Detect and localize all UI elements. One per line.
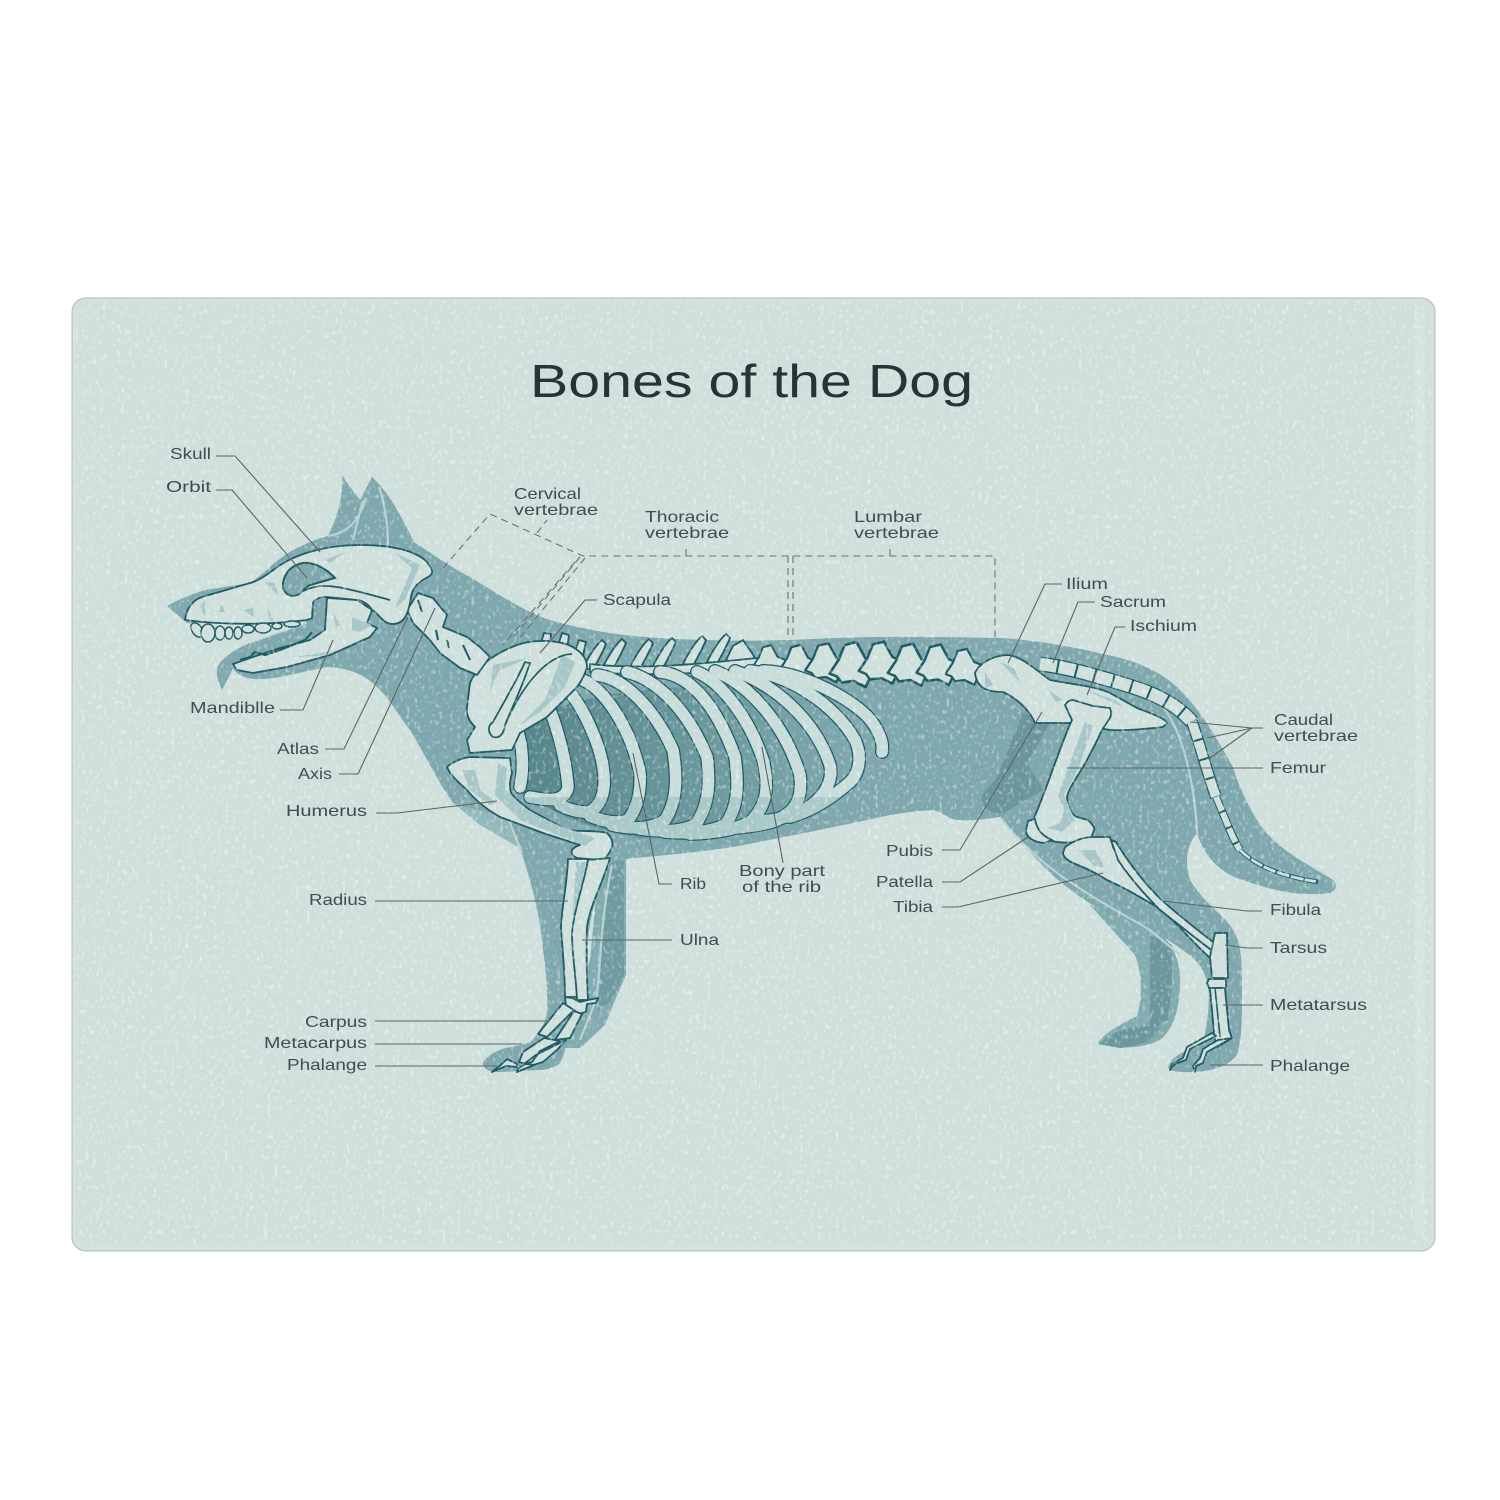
label: Sacrum: Sacrum: [1100, 594, 1166, 611]
patella: [1026, 819, 1052, 843]
radius: [561, 859, 588, 997]
label: Lumbar vertebrae: vertebrae: [854, 525, 939, 542]
label: Tarsus: Tarsus: [1270, 940, 1327, 957]
lumbar vertebrae: [752, 642, 986, 687]
vertebrae bracket dashed lines: [443, 514, 995, 645]
mandible: [233, 598, 377, 673]
label: Scapula: Scapula: [603, 592, 671, 609]
label: Ilium: Ilium: [1066, 576, 1108, 593]
label: Axis: [298, 608, 435, 783]
lower teeth: [240, 632, 312, 660]
hind phalanges: [1170, 1033, 1232, 1072]
skull arch and orbit: [297, 586, 390, 600]
ulna: [572, 858, 610, 1000]
far-side chest shade: [453, 803, 518, 847]
label: Axis: Axis: [298, 766, 332, 783]
metacarpus: [538, 1003, 582, 1040]
label: Fibula: [1163, 901, 1321, 919]
upper teeth: [188, 621, 300, 642]
label: Fibula: Fibula: [1270, 902, 1321, 919]
label: Caudal vertebrae: Caudal: [1274, 712, 1333, 729]
orbit: [283, 563, 335, 596]
label: Cervical vertebrae: [514, 486, 598, 519]
humerus: [447, 757, 612, 860]
label: Orbit: [166, 479, 307, 578]
label: Thoracic vertebrae: vertebrae: [645, 525, 729, 542]
far front leg shadow: [560, 855, 626, 1048]
label: Cervical vertebrae: Cervical: [514, 486, 581, 503]
fore claws: [492, 1059, 535, 1072]
cervical vertebrae: [407, 593, 490, 675]
tail: [1040, 664, 1318, 882]
label: Skull: [170, 446, 320, 552]
label: Carpus: Carpus: [305, 1014, 367, 1031]
label: Thoracic vertebrae: [645, 509, 729, 542]
fibula: [1111, 840, 1217, 952]
label: Mandiblle: Mandiblle: [190, 700, 275, 717]
label: Ischium: Ischium: [1130, 618, 1197, 635]
label: Ilium: [1008, 576, 1108, 663]
label: Orbit: Orbit: [166, 479, 212, 496]
label: Tarsus: [1225, 940, 1327, 957]
tibia: [1063, 837, 1217, 958]
label: Phalange (fore): Phalange: [287, 1057, 367, 1074]
label: Bony part of the rib: of the rib: [742, 879, 821, 896]
dog silhouette: [167, 475, 1336, 1072]
label: Lumbar vertebrae: [854, 509, 939, 542]
cutting board panel: [72, 298, 1435, 1251]
title: Bones of the Dog: [530, 355, 973, 407]
label: Lumbar vertebrae: Lumbar: [854, 509, 923, 526]
label: Rib: [633, 753, 706, 893]
label: Metacarpus: Metacarpus: [264, 1035, 367, 1052]
label: Scapula: [540, 592, 671, 653]
speckled glass texture: [76, 301, 1431, 1243]
label: Humerus: Humerus: [286, 803, 367, 820]
label: Tibia: [893, 873, 1103, 916]
label: Phalange (hind): Phalange: [1270, 1058, 1350, 1075]
label: Caudal vertebrae: [1190, 712, 1358, 758]
thoracic vertebrae: [540, 633, 760, 674]
scapular spine: [489, 662, 530, 737]
tarsus: [1207, 933, 1228, 988]
label: Rib: Rib: [680, 876, 706, 893]
label: Humerus: [286, 801, 497, 820]
label: Metatarsus: Metatarsus: [1270, 997, 1367, 1014]
thorax interior shade: [515, 686, 855, 838]
skull: [185, 545, 432, 624]
carpus: [565, 997, 598, 1014]
silhouette highlights: ears, haunch, tail, chest: [250, 487, 1197, 1040]
label: Bony part of the rib: Bony part: [739, 863, 826, 880]
label: Patella: Patella: [876, 874, 933, 891]
far hind leg overlap shade: [982, 713, 1050, 813]
label: Bony part of the rib: [739, 747, 826, 896]
skeleton: [185, 545, 1318, 1072]
label: Thoracic vertebrae: Thoracic: [645, 509, 719, 526]
label: Atlas: Atlas: [277, 741, 319, 758]
label: Pubis: [886, 712, 1042, 860]
label: Tibia: Tibia: [893, 899, 933, 916]
pelvis: [975, 655, 1167, 730]
label: Atlas: [277, 617, 408, 758]
label: Ischium: [1087, 618, 1197, 695]
far hind leg shadow: [1090, 905, 1180, 1048]
label: Cervical vertebrae: vertebrae: [514, 502, 598, 519]
label: Caudal vertebrae: vertebrae: [1274, 728, 1358, 745]
fore phalanges: [519, 1038, 566, 1066]
scapula: [467, 641, 587, 753]
metatarsus: [1210, 988, 1232, 1047]
label: Pubis: Pubis: [886, 843, 933, 860]
label: Ulna: Ulna: [680, 932, 719, 949]
label: Mandiblle: [190, 640, 333, 717]
label: Sacrum: [1053, 594, 1166, 663]
ribs: [517, 671, 882, 834]
femur: [1033, 700, 1111, 843]
label: Femur: Femur: [1270, 760, 1327, 777]
label: Ulna: [582, 932, 719, 949]
label: Radius: Radius: [309, 892, 367, 909]
label: Patella: [876, 837, 1028, 891]
label: Skull: Skull: [170, 446, 211, 463]
